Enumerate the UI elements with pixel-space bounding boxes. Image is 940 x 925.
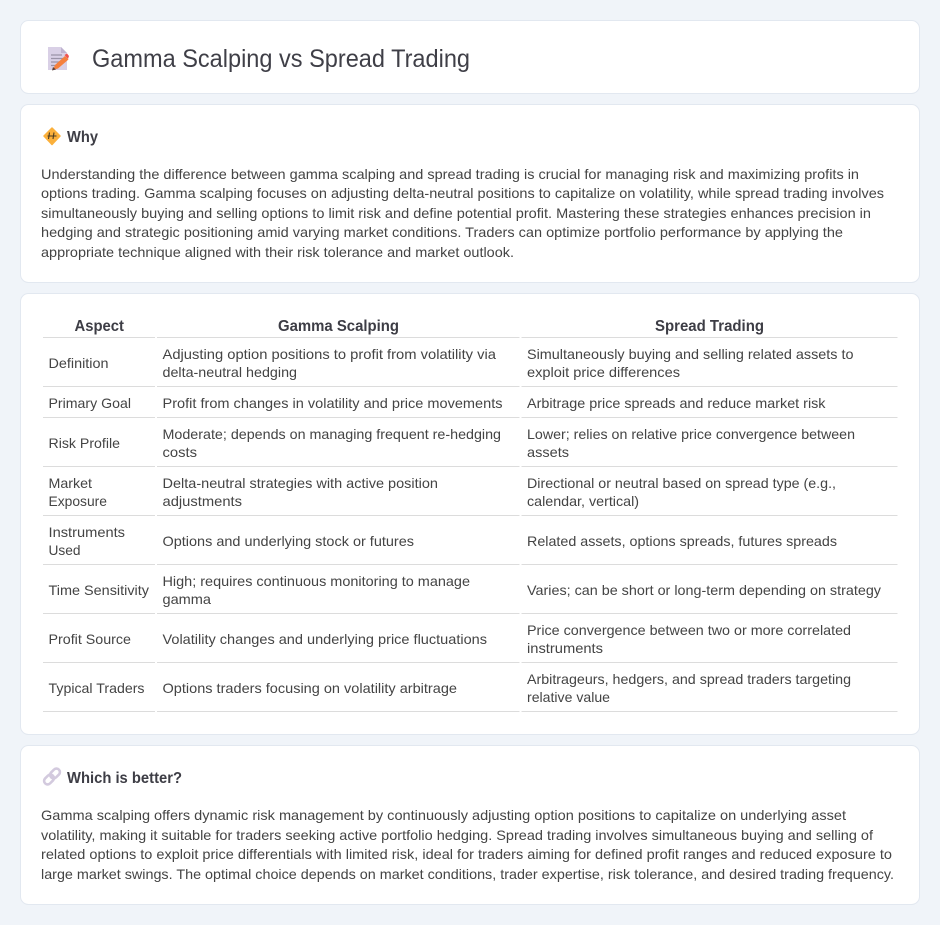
row: instruments used: Options and underlying stock or futures bbox=[162, 533, 414, 549]
row: profit source: Price convergence between two or more correlated bbox=[527, 622, 851, 638]
row: market exposure bbox=[48, 475, 836, 509]
text block: why paragraph: simultaneously buying and selling options to limit risk and define potential profit. Mastering these strategies enhances precision in bbox=[41, 205, 871, 221]
row: market exposure: Delta-neutral strategies with active position bbox=[162, 475, 438, 491]
row: typical traders: Typical Traders bbox=[48, 680, 144, 696]
panel: comparison table bbox=[20, 294, 920, 734]
row: risk profile: assets bbox=[527, 444, 569, 460]
panel: why bbox=[20, 104, 920, 282]
icon: chain link bbox=[43, 767, 61, 786]
panel: title header bbox=[20, 20, 920, 94]
row: market exposure: Market bbox=[48, 475, 92, 491]
row: primary goal: Primary Goal bbox=[48, 395, 131, 411]
row: typical traders bbox=[48, 671, 851, 705]
row: risk profile: Moderate; depends on managing frequent re-hedging bbox=[162, 426, 501, 442]
text block: why paragraph bbox=[41, 166, 884, 260]
text block: why paragraph: hedging and strategic positioning amid varying market conditions. Traders can optimize portfolio performance by applying the bbox=[41, 224, 843, 240]
row: time sensitivity: Time Sensitivity bbox=[48, 582, 149, 598]
text block: which is better paragraph: Gamma scalping offers dynamic risk management by continuously adjusting option positions to capitalize on underlying asset bbox=[41, 807, 846, 823]
text block: which is better paragraph: large market swings. The optimal choice depends on market conditions, trader expertise, risk tolerance, and desired trading frequency. bbox=[41, 866, 894, 882]
row: market exposure: adjustments bbox=[162, 493, 242, 509]
row: risk profile: Lower; relies on relative price convergence between bbox=[527, 426, 855, 442]
row: instruments used: Instruments bbox=[48, 524, 125, 540]
row: instruments used bbox=[48, 524, 837, 558]
row: risk profile: costs bbox=[162, 444, 197, 460]
table header row bbox=[74, 318, 764, 335]
table header row: Gamma Scalping bbox=[278, 318, 399, 335]
table header row: Aspect bbox=[74, 318, 125, 335]
table header row: Spread Trading bbox=[655, 318, 764, 335]
row: primary goal bbox=[48, 395, 827, 411]
text block: why paragraph: options trading. Gamma scalping focuses on adjusting delta-neutral positions to capitalize on volatility, while spread trading involves bbox=[41, 185, 884, 201]
row: definition: delta-neutral hedging bbox=[162, 364, 297, 380]
row: definition: Adjusting option positions to profit from volatility via bbox=[162, 346, 496, 362]
text block: why paragraph: Understanding the difference between gamma scalping and spread trading is crucial for managing risk and maximizing profits in bbox=[41, 166, 859, 182]
heading: which is better: Which is better? bbox=[67, 770, 182, 787]
row: risk profile: Risk Profile bbox=[48, 435, 120, 451]
heading: why: Why bbox=[67, 129, 98, 146]
row: time sensitivity: gamma bbox=[162, 591, 211, 607]
row: profit source: Profit Source bbox=[48, 631, 131, 647]
row: primary goal: Profit from changes in volatility and price movements bbox=[162, 395, 502, 411]
row: typical traders: relative value bbox=[527, 689, 610, 705]
icon: warning diamond bbox=[44, 128, 60, 144]
row: profit source: instruments bbox=[527, 640, 603, 656]
text block: which is better paragraph: related options to exploit price differentials with limited risk, ideal for traders aiming for defined profit ranges and reduced exposure to bbox=[41, 846, 892, 862]
row: instruments used: Related assets, options spreads, futures spreads bbox=[527, 533, 837, 549]
row: time sensitivity: Varies; can be short or long-term depending on strategy bbox=[527, 582, 881, 598]
icon: document with pencil bbox=[48, 47, 69, 70]
row: time sensitivity bbox=[48, 573, 881, 607]
row: profit source bbox=[48, 622, 851, 656]
text block: why paragraph: appropriate technique aligned with their risk tolerance and market outlook. bbox=[41, 244, 514, 260]
row: risk profile bbox=[48, 426, 855, 460]
row: definition: Definition bbox=[48, 355, 108, 371]
panel: which is better bbox=[20, 746, 920, 904]
row: typical traders: Options traders focusing on volatility arbitrage bbox=[162, 680, 457, 696]
row: profit source: Volatility changes and underlying price fluctuations bbox=[162, 631, 487, 647]
text block: which is better paragraph: volatility, making it suitable for traders seeking active portfolio hedging. Spread trading involves simultaneous buying and selling of bbox=[41, 827, 873, 843]
row: market exposure: Directional or neutral based on spread type (e.g., bbox=[527, 475, 836, 491]
text block: which is better paragraph bbox=[41, 807, 894, 882]
row: typical traders: Arbitrageurs, hedgers, and spread traders targeting bbox=[527, 671, 851, 687]
row: market exposure: Exposure bbox=[48, 493, 107, 509]
row: definition bbox=[48, 346, 854, 380]
row: definition: exploit price differences bbox=[527, 364, 680, 380]
row: definition: Simultaneously buying and selling related assets to bbox=[527, 346, 854, 362]
row: instruments used: Used bbox=[48, 542, 80, 558]
row: time sensitivity: High; requires continuous monitoring to manage bbox=[162, 573, 470, 589]
row: market exposure: calendar, vertical) bbox=[527, 493, 639, 509]
row: primary goal: Arbitrage price spreads and reduce market risk bbox=[527, 395, 827, 411]
title: Gamma Scalping vs Spread Trading bbox=[92, 45, 470, 73]
